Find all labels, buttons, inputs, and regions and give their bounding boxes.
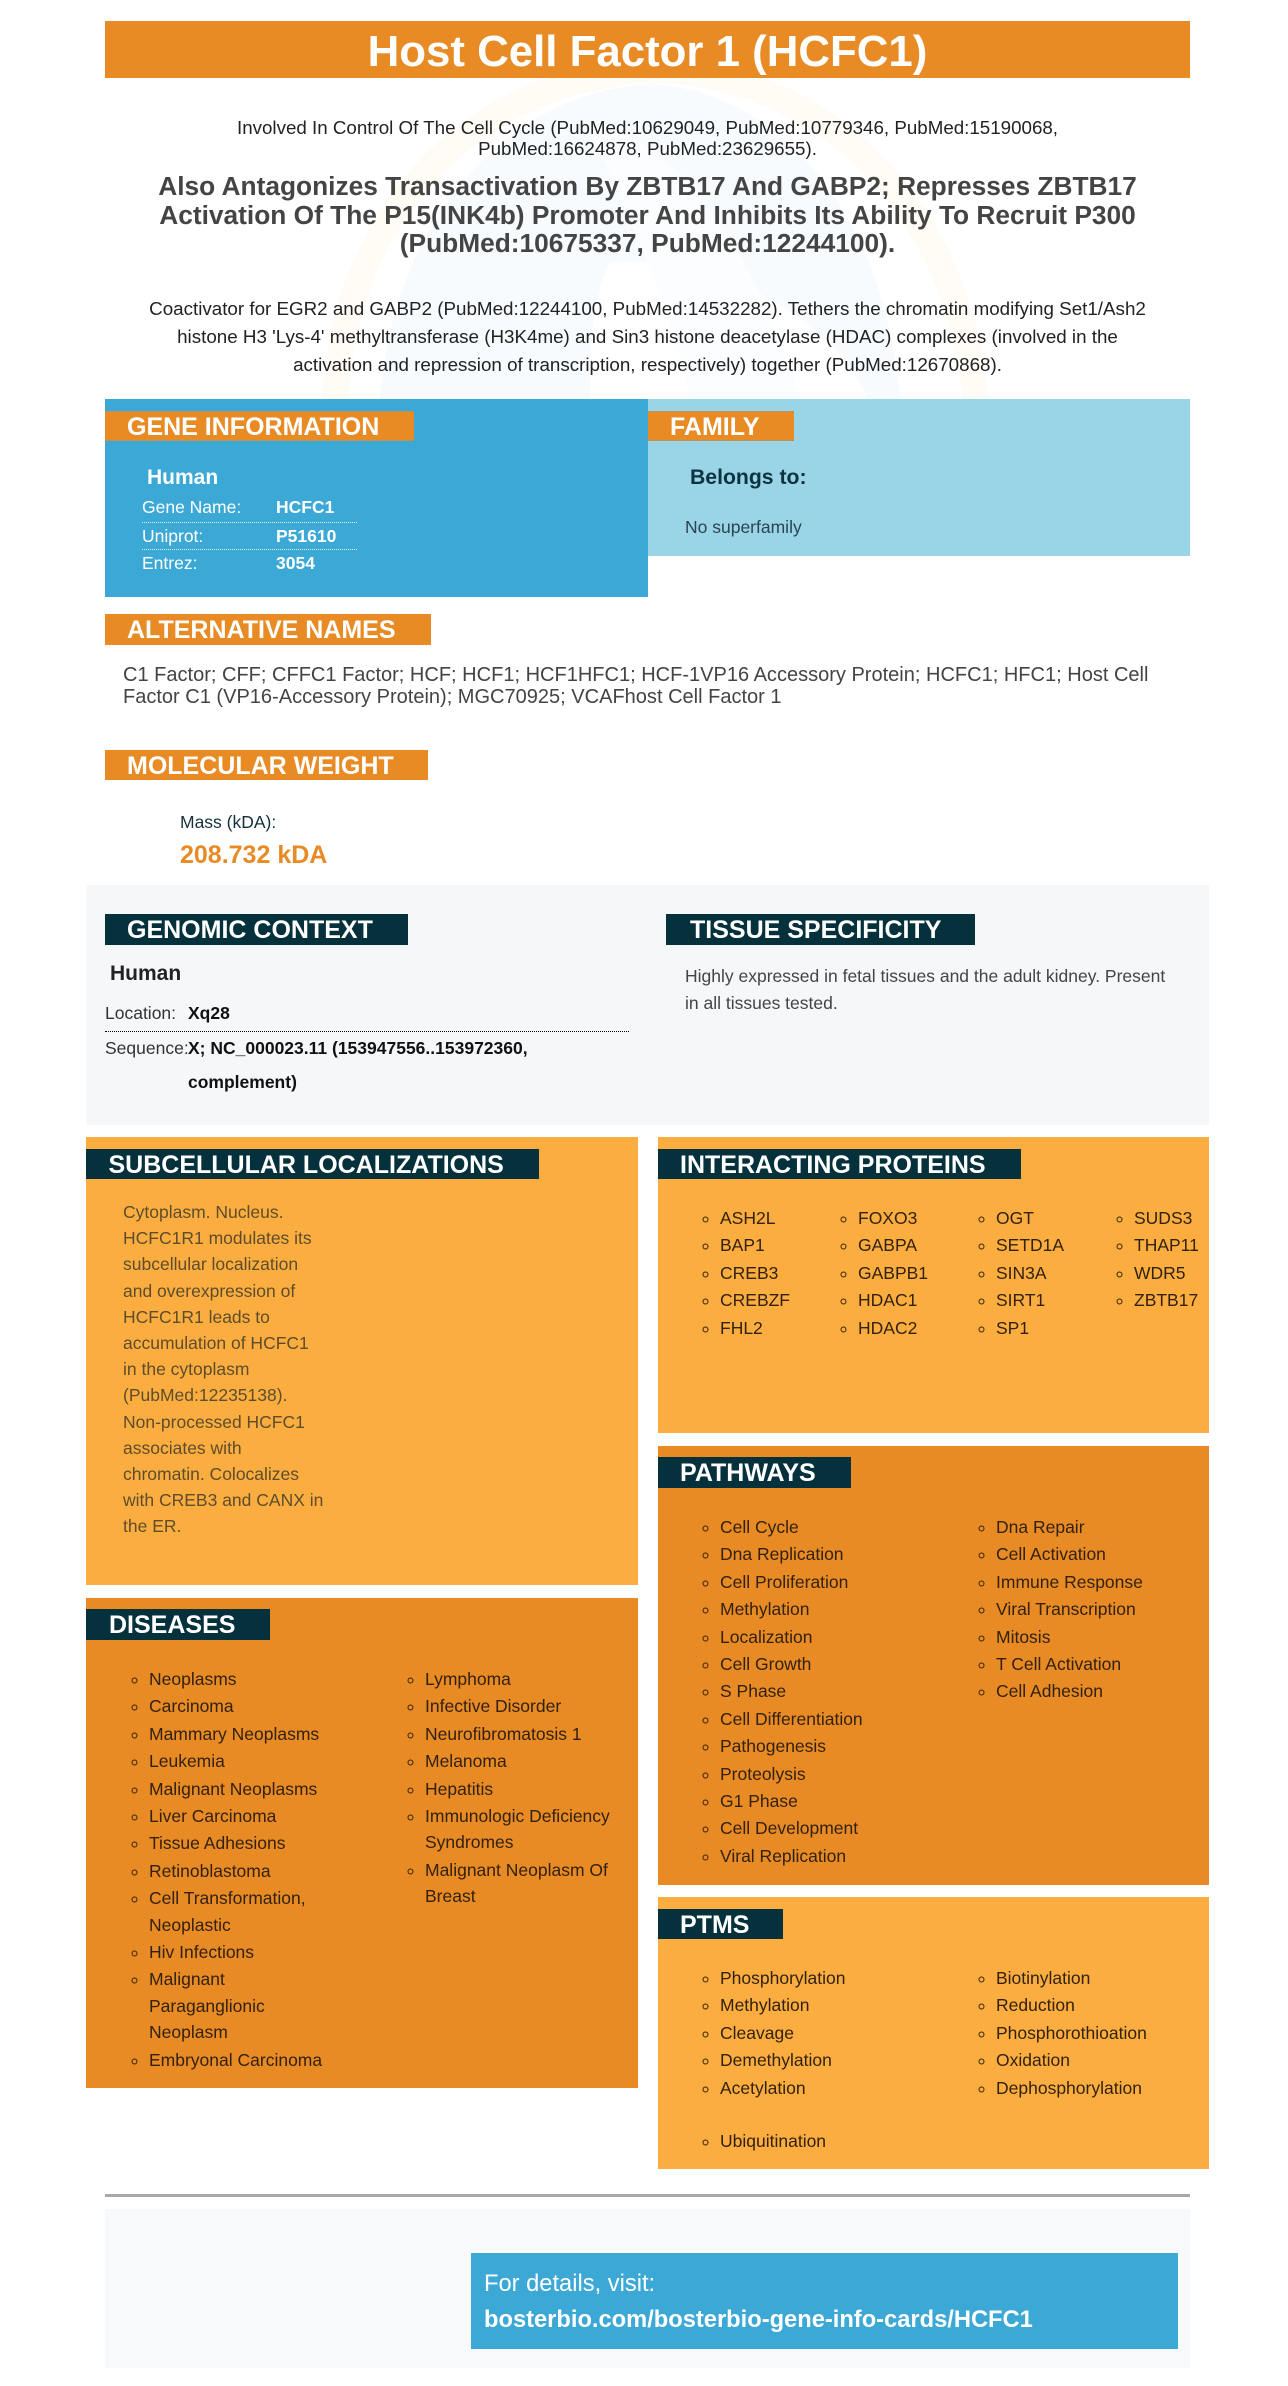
proteins column 1: CREB3 (720, 1263, 778, 1283)
diseases list column 1: Liver Carcinoma (149, 1806, 276, 1826)
panel: interacting proteins (658, 1137, 1209, 1433)
proteins column 4: WDR5 (1134, 1263, 1186, 1283)
pathways column 1: Cell Cycle (720, 1517, 799, 1537)
pathways column 2 (978, 1517, 1143, 1701)
description paragraph: activation and repression of transcription, respectively) together (PubMed:12670868). (293, 354, 1002, 375)
diseases list column 2: Hepatitis (425, 1779, 493, 1799)
diseases list column 2: Immunologic Deficiency (425, 1806, 610, 1826)
proteins column 3: SIRT1 (996, 1290, 1045, 1310)
heading: tissue specificity: TISSUE SPECIFICITY (690, 916, 941, 944)
sequence value: X; NC_000023.11 (153947556..153972360, (188, 1038, 528, 1058)
diseases list column 1: Malignant (149, 1969, 225, 1989)
pathways column 2: Immune Response (996, 1572, 1143, 1592)
diseases list column 1: Neoplasm (149, 2022, 228, 2042)
tissue specificity text: in all tissues tested. (685, 993, 838, 1013)
pathways column 2: T Cell Activation (996, 1654, 1121, 1674)
proteins column 3 (978, 1208, 1064, 1338)
superfamily value: No superfamily (685, 517, 802, 537)
title banner (105, 21, 1190, 78)
uniprot row: P51610 (276, 526, 336, 546)
ptms column 1: Acetylation (720, 2078, 806, 2098)
bold highlight paragraph: Also Antagonizes Transactivation By ZBTB17 And GABP2; Represses ZBTB17 (158, 171, 1137, 201)
gene name row: HCFC1 (276, 497, 334, 517)
proteins column 2: HDAC1 (858, 1290, 917, 1310)
sequence label: Sequence: (105, 1038, 189, 1058)
intro paragraph: function: Involved In Control Of The Cell Cycle (PubMed:10629049, PubMed:10779346, PubMed:15190068, (237, 116, 1058, 138)
proteins column 4 (1116, 1208, 1199, 1310)
proteins column 2: GABPB1 (858, 1263, 928, 1283)
pathways column 1: Localization (720, 1627, 812, 1647)
localization text: Cytoplasm. Nucleus. (123, 1202, 283, 1222)
heading: family (648, 411, 794, 441)
panel: subcellular localizations (86, 1137, 638, 1585)
heading: interacting proteins: INTERACTING PROTEINS (680, 1151, 986, 1179)
proteins column 2: FOXO3 (858, 1208, 917, 1228)
uniprot row: Uniprot: (142, 526, 203, 546)
diseases list column 1: Neoplastic (149, 1915, 231, 1935)
localization text: in the cytoplasm (123, 1359, 249, 1379)
species: human: Human (147, 466, 218, 489)
diseases list column 1: Tissue Adhesions (149, 1833, 286, 1853)
proteins column 2 (840, 1208, 928, 1338)
diseases list column 1: Mammary Neoplasms (149, 1724, 319, 1744)
localization text: (PubMed:12235138). (123, 1385, 287, 1405)
call to action box (471, 2253, 1178, 2349)
proteins column 3: OGT (996, 1208, 1034, 1228)
mass label: Mass (kDA): (180, 812, 276, 832)
diseases list column 2: Syndromes (425, 1832, 514, 1852)
pathways column 1: Pathogenesis (720, 1736, 826, 1756)
pathways column 2: Cell Adhesion (996, 1681, 1103, 1701)
localization text: HCFC1R1 leads to (123, 1307, 270, 1327)
bold highlight paragraph: Activation Of The P15(INK4b) Promoter And Inhibits Its Ability To Recruit P300 (159, 200, 1136, 230)
localization text: Non-processed HCFC1 (123, 1412, 305, 1432)
pathways column 1: Cell Growth (720, 1654, 811, 1674)
title text: Host Cell Factor 1 (HCFC1) (368, 27, 927, 76)
entrez row (142, 553, 315, 573)
ptms column 1: Cleavage (720, 2023, 794, 2043)
entrez row: Entrez: (142, 553, 197, 573)
pathways column 2: Cell Activation (996, 1544, 1106, 1564)
diseases list column 2: Malignant Neoplasm Of (425, 1860, 608, 1880)
pathways column 1: Proteolysis (720, 1764, 806, 1784)
ptms column 1: Phosphorylation (720, 1968, 846, 1988)
panel: genomic context and tissue specificity (86, 885, 1209, 1125)
location value: Xq28 (188, 1003, 230, 1023)
heading: alternative names: ALTERNATIVE NAMES (127, 616, 396, 644)
species: human: Human (110, 962, 181, 985)
mass value: 208.732 kDA (180, 840, 327, 868)
localization text: with CREB3 and CANX in (123, 1490, 323, 1510)
intro paragraph: function: PubMed:16624878, PubMed:23629655). (478, 138, 817, 158)
pathways column 1: Cell Differentiation (720, 1709, 863, 1729)
tissue specificity text: Highly expressed in fetal tissues and the adult kidney. Present (685, 966, 1165, 986)
heading: gene information: GENE INFORMATION (127, 413, 379, 441)
belongs to label: Belongs to: (690, 466, 807, 489)
panel: diseases (86, 1598, 638, 2088)
pathways column 1: Methylation (720, 1599, 810, 1619)
diseases list column 2: Neurofibromatosis 1 (425, 1724, 582, 1744)
gene name row: Gene Name: (142, 497, 241, 517)
proteins column 4: ZBTB17 (1134, 1290, 1198, 1310)
proteins column 1 (702, 1208, 790, 1338)
entrez row: 3054 (276, 553, 315, 573)
heading: pathways: PATHWAYS (680, 1459, 816, 1487)
diseases list column 2: Infective Disorder (425, 1696, 561, 1716)
proteins column 2: GABPA (858, 1235, 917, 1255)
localization text: accumulation of HCFC1 (123, 1333, 309, 1353)
alternative names text: Factor C1 (VP16-Accessory Protein); MGC70925; VCAFhost Cell Factor 1 (123, 686, 782, 708)
ptms column 2: Reduction (996, 1995, 1075, 2015)
panel: ptms (658, 1897, 1209, 2169)
pathways column 1: G1 Phase (720, 1791, 798, 1811)
gene name row (142, 495, 357, 523)
panel: family (648, 399, 1190, 556)
description paragraph (149, 298, 1146, 375)
pathways column 1: Dna Replication (720, 1544, 844, 1564)
proteins column 4: SUDS3 (1134, 1208, 1192, 1228)
intro paragraph: function (237, 116, 1058, 159)
background watermark logo (322, 78, 988, 399)
proteins column 1: CREBZF (720, 1290, 790, 1310)
diseases list column 1: Embryonal Carcinoma (149, 2050, 322, 2070)
footer panel (105, 2209, 1190, 2368)
pathways column 1: Viral Replication (720, 1846, 846, 1866)
uniprot row (142, 523, 357, 550)
diseases list column 1: Cell Transformation, (149, 1888, 306, 1908)
panel: pathways (658, 1446, 1209, 1885)
proteins column 3: SETD1A (996, 1235, 1064, 1255)
diseases list column 1: Carcinoma (149, 1696, 234, 1716)
ptms column 2: Biotinylation (996, 1968, 1090, 1988)
ptms column 2: Oxidation (996, 2050, 1070, 2070)
diseases list column 1: Retinoblastoma (149, 1861, 271, 1881)
pathways column 1 (702, 1517, 863, 1866)
localization text (123, 1202, 323, 1536)
diseases list column 1: Malignant Neoplasms (149, 1779, 317, 1799)
ptms column 2: Dephosphorylation (996, 2078, 1142, 2098)
localization text: subcellular localization (123, 1254, 298, 1274)
sequence value (188, 1038, 528, 1092)
proteins column 3: SIN3A (996, 1263, 1047, 1283)
ptms column 2 (978, 1968, 1147, 2098)
location label: Location: (105, 1003, 176, 1023)
diseases list column 1 (132, 1669, 322, 2070)
localization text: the ER. (123, 1516, 181, 1536)
ptms column 2: Phosphorothioation (996, 2023, 1147, 2043)
diseases list column 2: Melanoma (425, 1751, 507, 1771)
ptms column 1 (702, 1968, 846, 2098)
ptms column 1: Methylation (720, 1995, 810, 2015)
localization text: HCFC1R1 modulates its (123, 1228, 312, 1248)
diseases list column 1: Leukemia (149, 1751, 225, 1771)
ptms extra item: Ubiquitination (720, 2131, 826, 2151)
panel: gene information (105, 399, 648, 597)
description paragraph: Coactivator for EGR2 and GABP2 (PubMed:12244100, PubMed:14532282). Tethers the chromatin modifying Set1/Ash2 (149, 298, 1146, 319)
localization text: associates with (123, 1438, 242, 1458)
tissue specificity text (685, 966, 1166, 1013)
pathways column 2: Viral Transcription (996, 1599, 1136, 1619)
alternative names text: C1 Factor; CFF; CFFC1 Factor; HCF; HCF1; HCF1HFC1; HCF-1VP16 Accessory Protein; HCFC1; HFC1; Host Cell (123, 664, 1148, 686)
footer label: For details, visit: (484, 2271, 655, 2297)
proteins column 1: ASH2L (720, 1208, 775, 1228)
description paragraph: histone H3 'Lys-4' methyltransferase (H3K4me) and Sin3 histone deacetylase (HDAC) complexes (involved in the (177, 326, 1118, 347)
heading: family: FAMILY (670, 413, 759, 441)
diseases list column 2: Breast (425, 1886, 476, 1906)
sequence value: complement) (188, 1072, 297, 1092)
heading: molecular weight: MOLECULAR WEIGHT (127, 752, 394, 780)
diseases list column 2: Lymphoma (425, 1669, 511, 1689)
bold highlight paragraph (158, 171, 1137, 258)
heading: diseases (86, 1609, 270, 1640)
pathways column 2: Dna Repair (996, 1517, 1085, 1537)
heading: ptms: PTMS (680, 1911, 749, 1939)
diseases list column 1: Paraganglionic (149, 1996, 265, 2016)
diseases list column 1: Neoplasms (149, 1669, 237, 1689)
alternative names text (123, 664, 1148, 708)
bold highlight paragraph: (PubMed:10675337, PubMed:12244100). (400, 228, 895, 258)
pathways column 2: Mitosis (996, 1627, 1050, 1647)
pathways column 1: S Phase (720, 1681, 786, 1701)
pathways column 1: Cell Proliferation (720, 1572, 848, 1592)
proteins column 1: FHL2 (720, 1318, 763, 1338)
heading: genomic context: GENOMIC CONTEXT (127, 916, 373, 944)
heading: diseases: DISEASES (109, 1611, 235, 1639)
footer url: bosterbio.com/bosterbio-gene-info-cards/HCFC1 (484, 2307, 1033, 2333)
heading: subcellular localizations: SUBCELLULAR LOCALIZATIONS (108, 1151, 504, 1179)
diseases list column 2 (408, 1669, 610, 1906)
heading: pathways (658, 1457, 851, 1488)
proteins column 3: SP1 (996, 1318, 1029, 1338)
pathways column 1: Cell Development (720, 1818, 858, 1838)
localization text: and overexpression of (123, 1281, 295, 1301)
ptms column 1: Demethylation (720, 2050, 832, 2070)
localization text: chromatin. Colocalizes (123, 1464, 299, 1484)
proteins column 1: BAP1 (720, 1235, 765, 1255)
proteins column 4: THAP11 (1134, 1235, 1199, 1255)
proteins column 2: HDAC2 (858, 1318, 917, 1338)
heading: ptms (658, 1909, 783, 1939)
diseases list column 1: Hiv Infections (149, 1942, 254, 1962)
